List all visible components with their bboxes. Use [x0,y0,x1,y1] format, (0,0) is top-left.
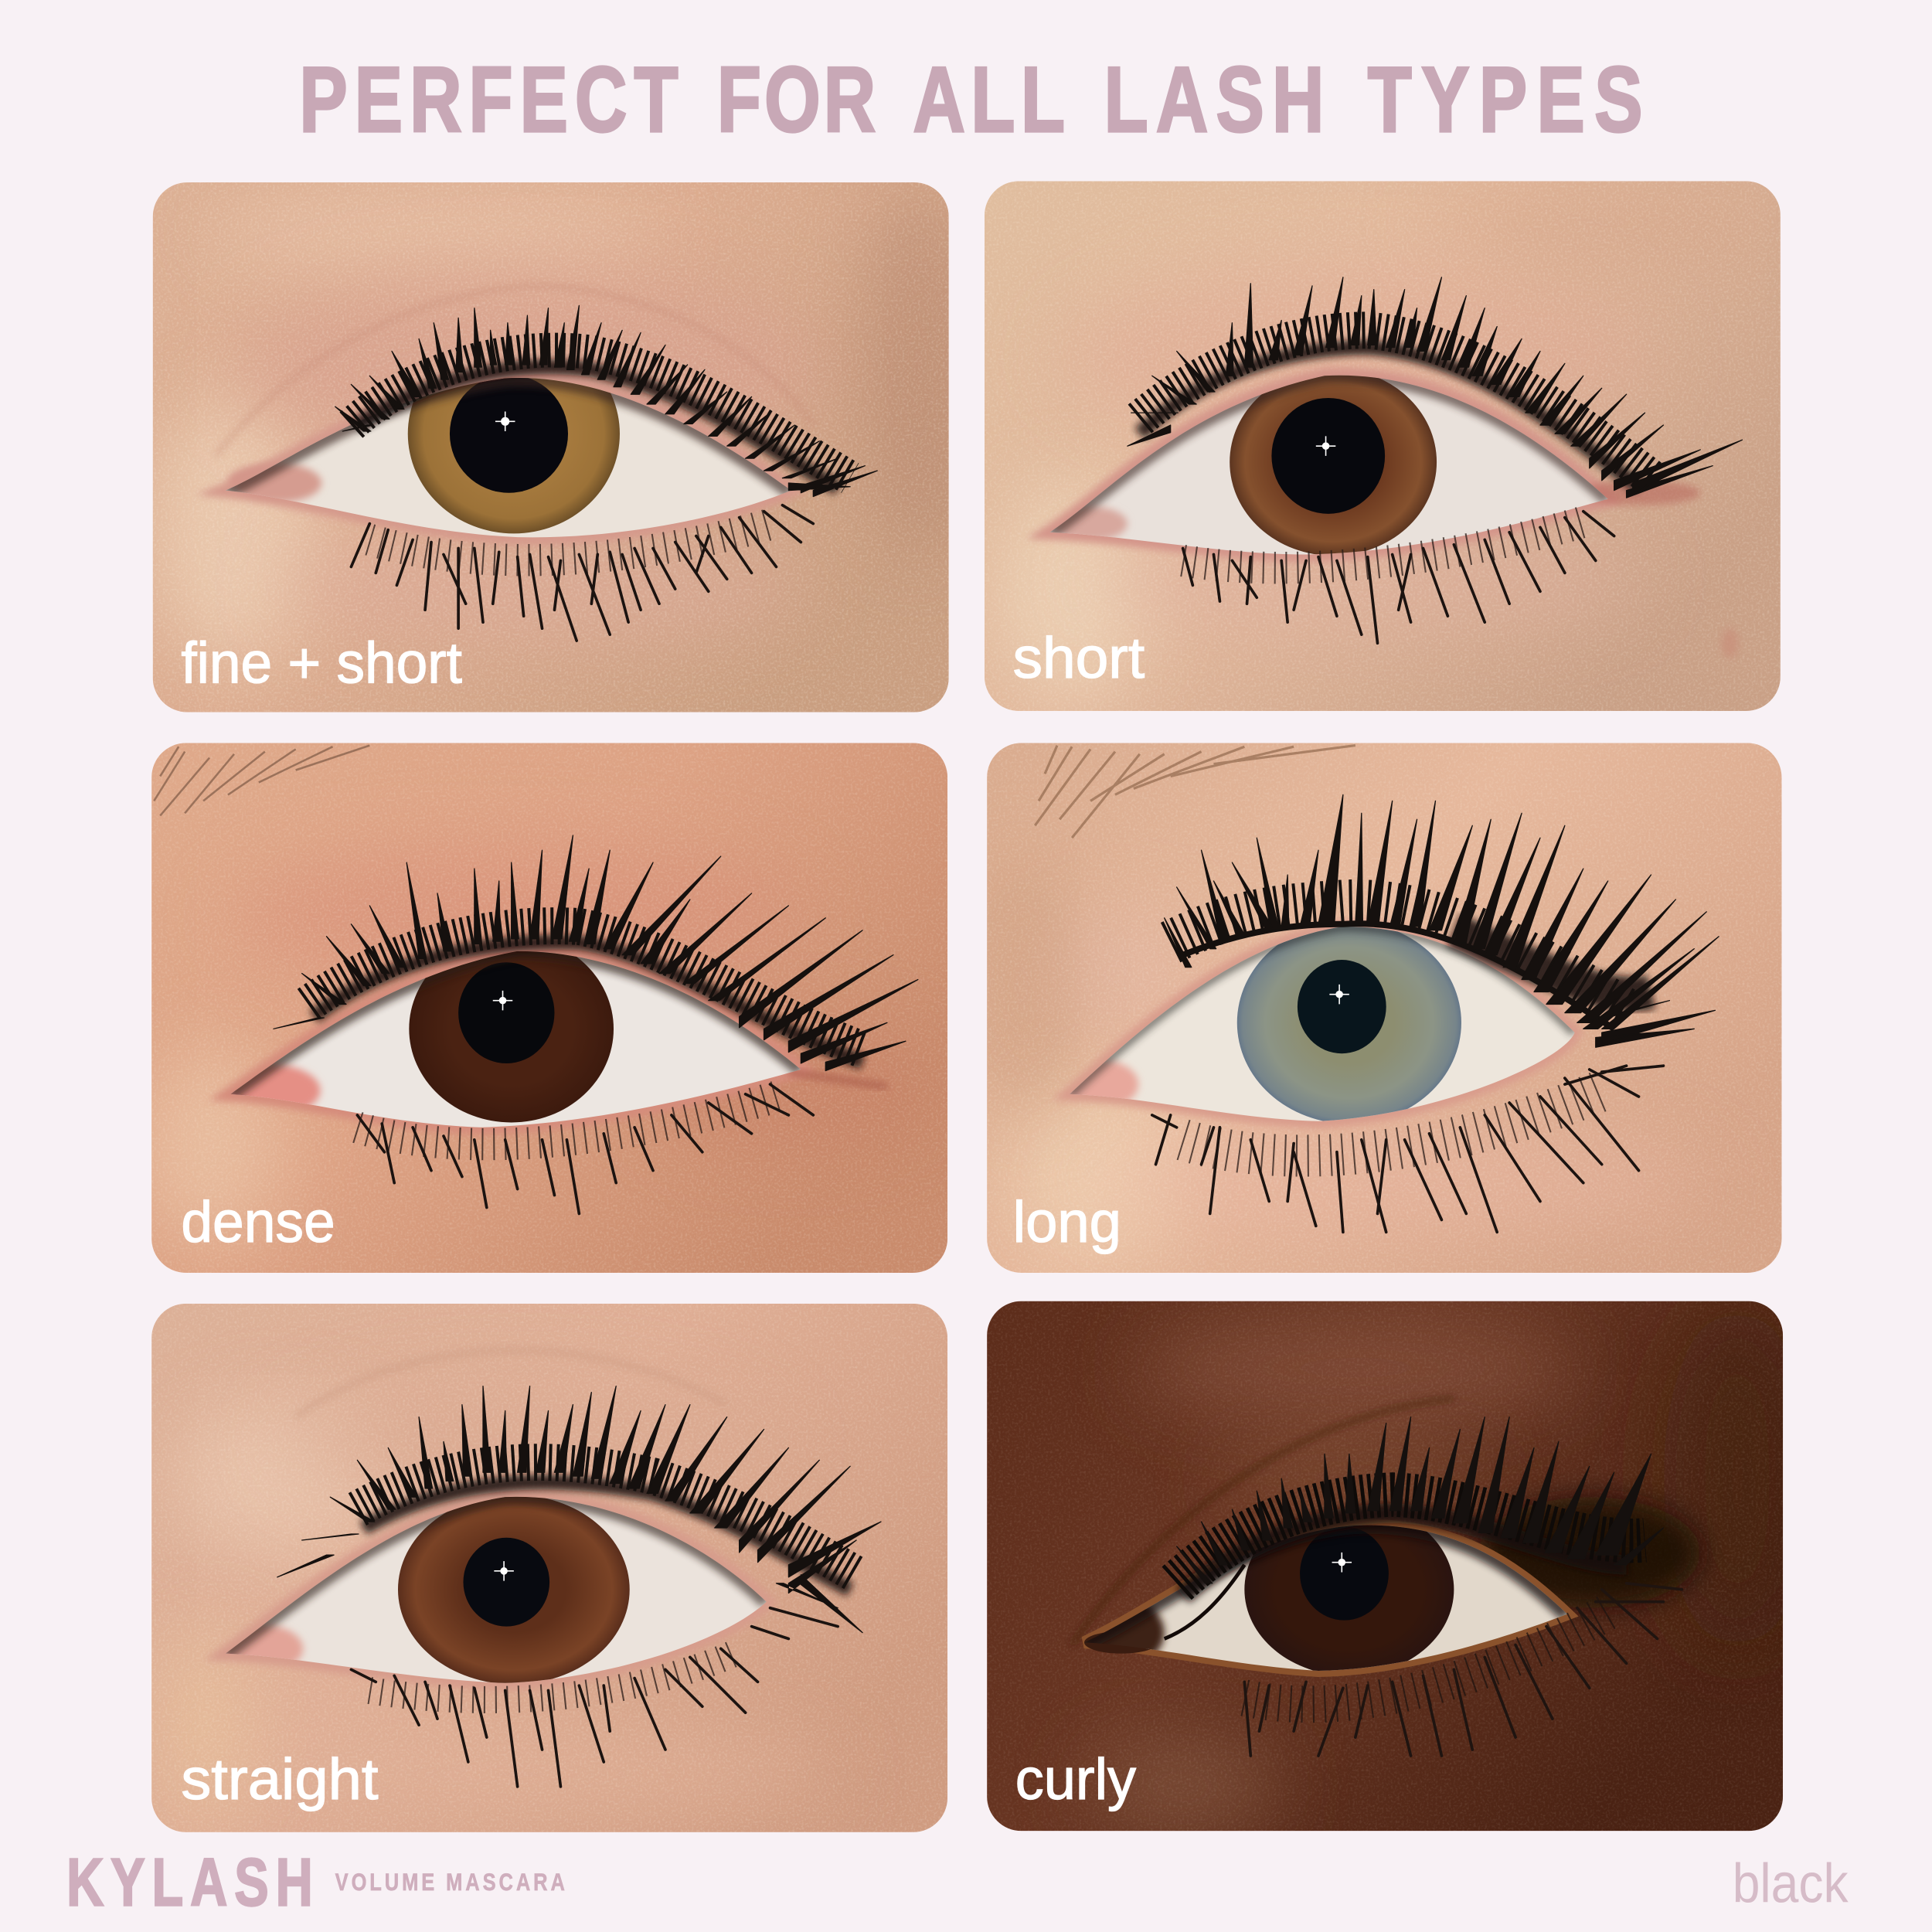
eye [1066,1503,1571,1675]
upper lashes [274,835,918,1071]
lower lashes [1244,1583,1682,1756]
skin [974,743,1781,1273]
eye [214,1491,776,1688]
label: curly [1015,1747,1137,1811]
title [299,48,1642,151]
skin [987,1301,1811,1836]
eye [1047,369,1700,560]
lower lashes [1183,512,1614,643]
label: short [1013,625,1145,690]
eyebrow hairs [154,746,369,815]
lower lashes [357,1084,813,1213]
upper lashes [277,1386,881,1633]
panel: curly [987,1301,1811,1836]
upper lashes [1165,1417,1663,1639]
title: TYPES [1368,48,1642,151]
title: LASH [1104,48,1324,151]
panel: short [985,179,1781,711]
lower lashes [1152,1066,1663,1232]
label: fine + short [181,630,462,695]
panel: fine + short [148,182,980,713]
title: PERFECT [299,48,678,151]
upper lashes [1165,794,1719,1047]
eye [199,374,799,547]
eyebrow hairs [1035,746,1355,838]
eye [209,935,887,1134]
title: FOR [717,48,876,151]
panel: straight [151,1304,947,1832]
skin [985,179,1781,711]
skin [148,182,980,713]
lower lashes [351,1608,838,1787]
label: straight [181,1747,379,1811]
shade name: black [1733,1853,1849,1915]
title: ALL [913,48,1065,151]
lower lashes [351,505,813,641]
label: long [1013,1189,1121,1254]
panel: long [974,743,1781,1273]
skin [151,1304,947,1832]
subtitle: volume mascara: VOLUME MASCARA [335,1869,565,1896]
brand: kylash: KYLASH [66,1844,313,1920]
eye [1060,918,1590,1128]
upper lashes [1128,277,1742,498]
skin [135,743,947,1273]
upper lashes [335,305,877,497]
panel: dense [135,743,947,1273]
label: dense [181,1189,335,1254]
